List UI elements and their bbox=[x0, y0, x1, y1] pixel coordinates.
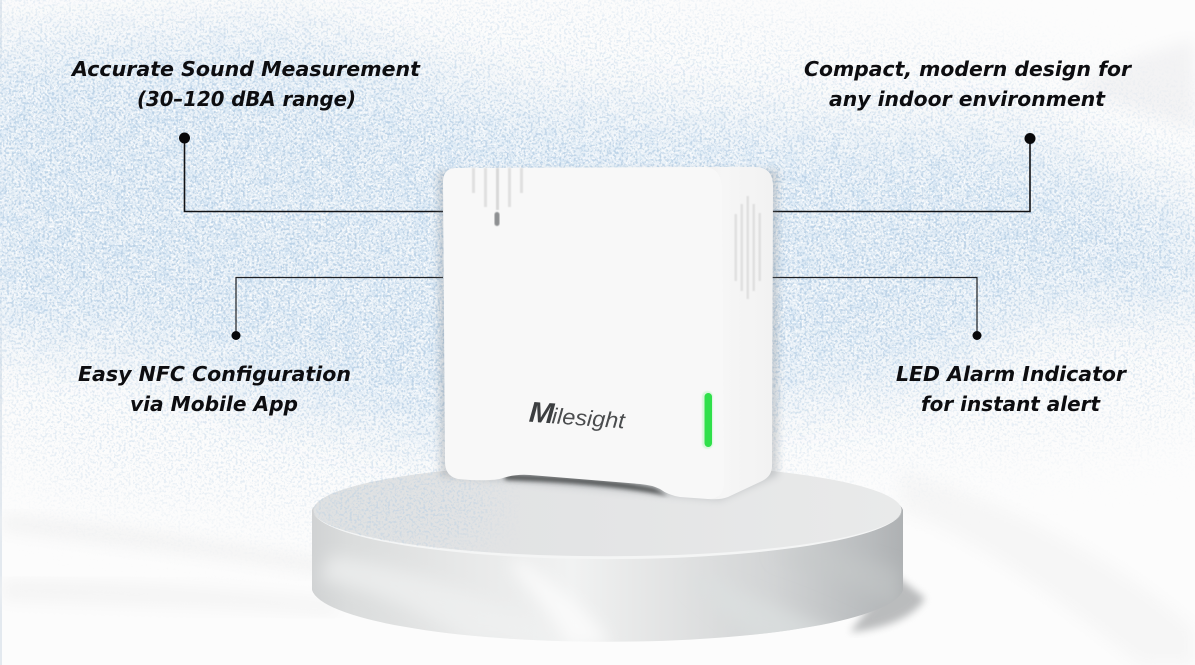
callout: LED alarm: for instant alert bbox=[921, 392, 1101, 416]
Milesight logo bbox=[528, 397, 627, 435]
callout: LED alarm: LED Alarm Indicator bbox=[896, 362, 1127, 386]
device side vents bbox=[734, 196, 761, 299]
connector: compact design bbox=[772, 133, 1036, 212]
marble podium bbox=[312, 470, 928, 642]
callout: accurate sound measurement: Accurate Sound Measurement bbox=[70, 57, 421, 81]
device microphone hole bbox=[494, 212, 500, 226]
callout: LED alarm bbox=[896, 362, 1127, 416]
podium shadow bbox=[850, 575, 925, 632]
device front face bbox=[443, 167, 724, 499]
callout: compact design: Compact, modern design for bbox=[804, 57, 1132, 81]
LED indicator bbox=[702, 391, 713, 449]
callout: NFC configuration: via Mobile App bbox=[130, 392, 298, 416]
callout: compact design bbox=[804, 57, 1132, 111]
device shadow bbox=[438, 170, 778, 500]
device top vents bbox=[472, 168, 523, 210]
connector: LED alarm bbox=[772, 278, 982, 340]
connector: sound measurement bbox=[179, 132, 443, 212]
callout: compact design: any indoor environment bbox=[829, 87, 1106, 111]
callout: NFC configuration bbox=[78, 362, 351, 416]
Milesight logo: M bbox=[528, 397, 556, 430]
callout: NFC configuration: Easy NFC Configuration bbox=[78, 362, 351, 386]
callout: accurate sound measurement bbox=[70, 57, 421, 111]
podium marble veining bbox=[324, 558, 894, 640]
connector lines bbox=[179, 132, 1036, 340]
Milesight logo: ilesight bbox=[551, 403, 627, 433]
device right side face bbox=[700, 167, 773, 499]
device under-notch shadow bbox=[505, 474, 668, 496]
speckle on podium top bbox=[314, 472, 502, 549]
podium top surface bbox=[314, 463, 902, 557]
callout: accurate sound measurement: (30–120 dBA range) bbox=[137, 87, 356, 111]
podium side wall bbox=[312, 465, 903, 642]
device: Milesight sensor bbox=[438, 167, 778, 500]
connector: NFC configuration bbox=[232, 278, 443, 340]
